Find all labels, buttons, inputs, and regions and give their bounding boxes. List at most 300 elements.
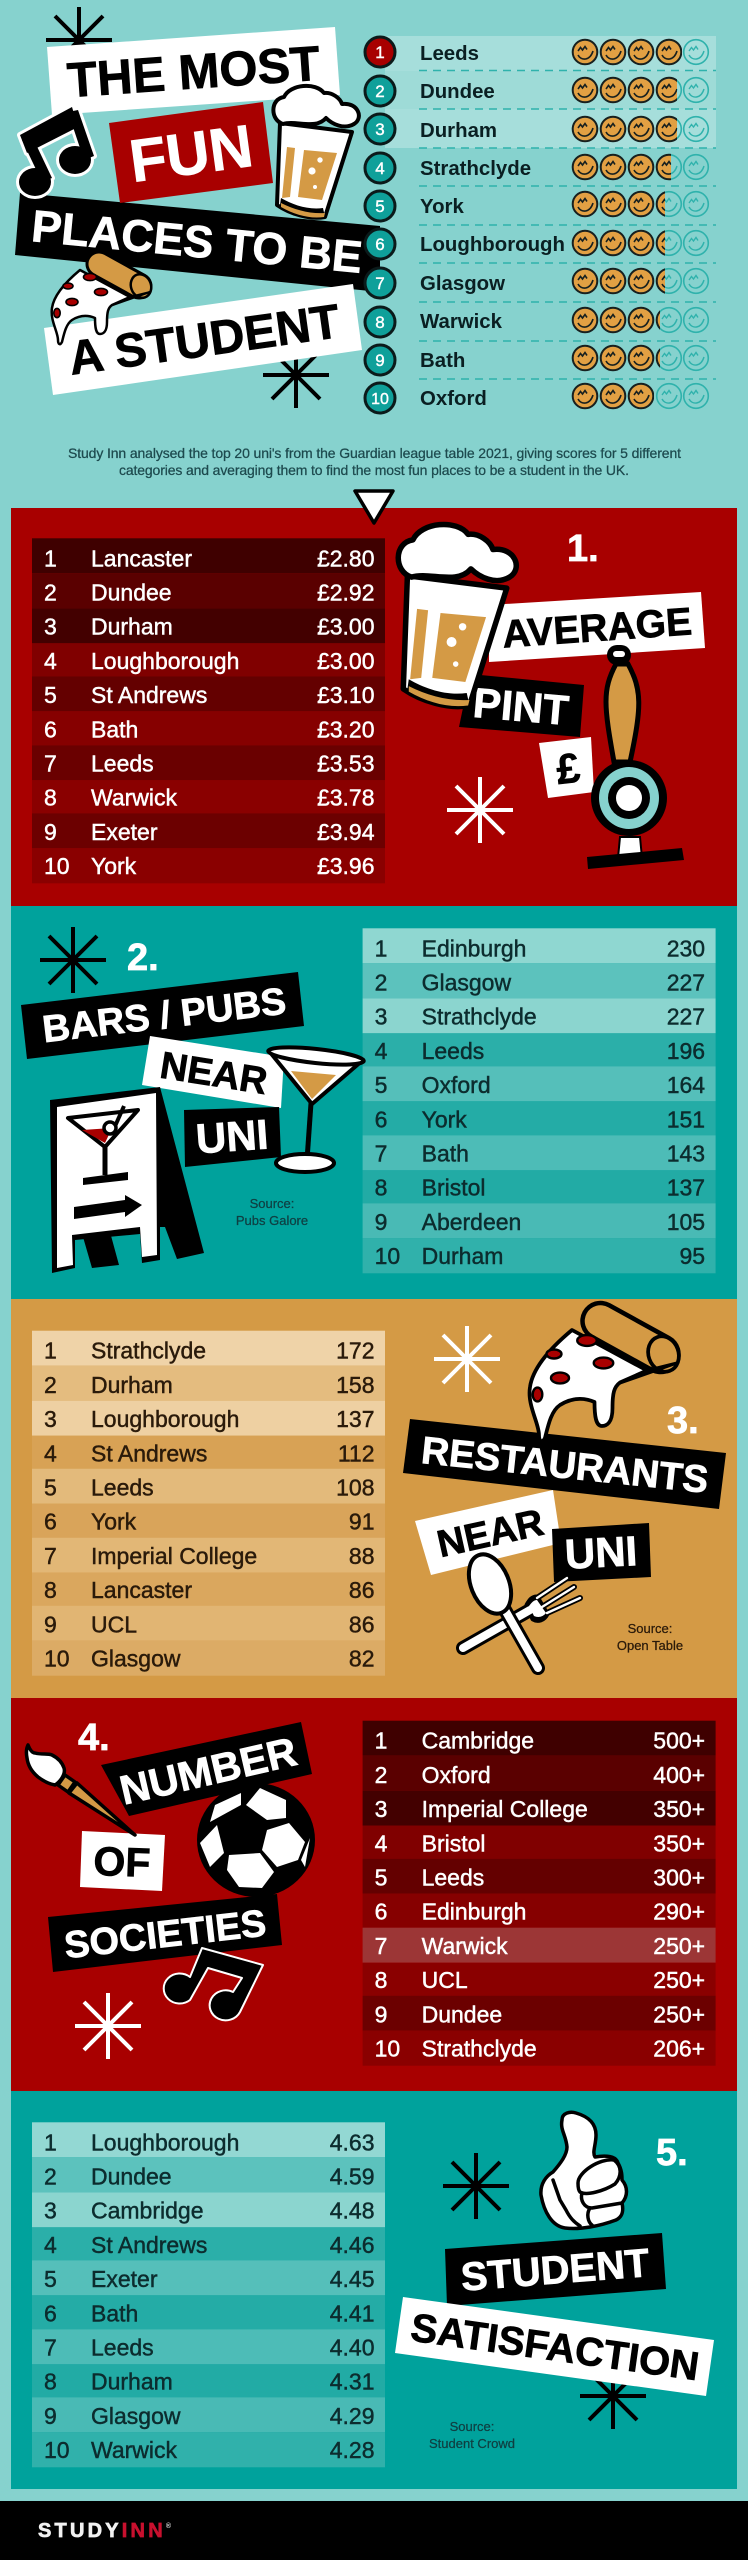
row 1: Strathclyde [91, 1338, 206, 1364]
row 4: 4 [375, 1038, 388, 1064]
rank numbers: 2 [375, 82, 385, 101]
heading: 5.: 5. [656, 2132, 688, 2174]
heading: 2.: 2. [127, 937, 159, 979]
panel background [11, 1698, 737, 2091]
row 1 [375, 935, 705, 961]
row 10 [44, 1646, 374, 1672]
row 9 [44, 819, 375, 845]
row 5: 300+ [653, 1864, 705, 1890]
row 3: Strathclyde [422, 1004, 537, 1030]
university names: York [420, 196, 464, 218]
heading: RESTAURANTS: RESTAURANTS [419, 1429, 710, 1502]
icon: football [197, 1783, 315, 1897]
row 8: 4.31 [330, 2369, 374, 2395]
panel: 5 student satisfaction [11, 2091, 737, 2489]
rank numbers: 7 [375, 274, 385, 293]
heading: STUDENT: STUDENT [459, 2241, 651, 2300]
row 6: £3.20 [317, 716, 374, 742]
panel: 1 average pint [11, 508, 737, 906]
heading: NEAR: NEAR [433, 1502, 548, 1566]
sign: mini martini [68, 1106, 138, 1185]
row 6: 6 [44, 2300, 57, 2326]
row 3: £3.00 [317, 614, 374, 640]
row 1: 500+ [653, 1728, 705, 1754]
row 3 [44, 1406, 374, 1432]
row 7: 88 [349, 1543, 374, 1569]
university names: Warwick [420, 311, 503, 333]
row 7 [375, 1140, 705, 1166]
row 10: 10 [44, 853, 70, 879]
heading: 3.: 3. [667, 1400, 699, 1442]
row 9: 9 [375, 2001, 387, 2027]
icon: paintbrush [26, 1745, 135, 1835]
row 2: 2 [44, 1372, 57, 1398]
row 4: 196 [667, 1038, 705, 1064]
university names [420, 43, 565, 410]
row 7 [44, 1543, 374, 1569]
rank badges [365, 37, 395, 413]
heading: BARS / PUBS: BARS / PUBS [40, 981, 288, 1051]
row 7 [375, 1933, 705, 1959]
row 9 [375, 1209, 705, 1235]
row 9: 9 [375, 1209, 387, 1235]
panel background [11, 906, 737, 1299]
row 1 [44, 2129, 374, 2155]
icon: pizza slice [530, 1321, 684, 1441]
row 8: 8 [44, 2369, 57, 2395]
row 6: 6 [375, 1106, 387, 1132]
row 10: Glasgow [91, 1645, 181, 1671]
row 10: 206+ [653, 2035, 705, 2061]
university names: Glasgow [420, 273, 505, 295]
rank numbers [371, 43, 389, 408]
heading: OF [80, 1831, 165, 1891]
row 5 [375, 1072, 705, 1098]
icon: thumbs up [541, 2112, 626, 2229]
title line: THE MOST: THE MOST [65, 37, 322, 108]
icon: music note white outline [164, 1948, 263, 2020]
sign: arrow [74, 1195, 142, 1219]
row 10: 10 [44, 2437, 70, 2463]
row 6 [44, 716, 374, 742]
smiley ratings: empty outlines [657, 40, 708, 408]
row 1: Lancaster [91, 545, 192, 571]
row 6: Edinburgh [422, 1899, 526, 1925]
row 7: Warwick [422, 1933, 508, 1959]
row 2: Dundee [91, 579, 172, 605]
heading: NEAR: NEAR [157, 1045, 270, 1103]
logo: StudyInn: ® [166, 2522, 172, 2530]
heading: pound sign [539, 737, 594, 798]
panel background [11, 1299, 737, 1698]
source note [617, 1621, 683, 1653]
row 10: Strathclyde [422, 2035, 537, 2061]
row 8: 8 [44, 1577, 57, 1603]
heading: UNI: UNI [194, 1111, 270, 1162]
row 2 [44, 2164, 374, 2190]
row 5: 108 [336, 1474, 374, 1500]
row 1: 4.63 [330, 2129, 374, 2155]
row 8: 86 [349, 1577, 374, 1603]
title line: FUN: FUN [125, 112, 257, 195]
title line: FUN [109, 102, 273, 203]
row 9: 9 [44, 2403, 57, 2429]
icon: black star [40, 927, 106, 993]
row 1: 1 [44, 545, 57, 571]
row 6 [44, 1509, 374, 1535]
row 5: £3.10 [317, 682, 374, 708]
row 4 [375, 1830, 705, 1856]
row 6: 4.41 [330, 2300, 374, 2326]
smiley ratings: filled faces [573, 40, 681, 408]
source note: Open Table [617, 1638, 683, 1653]
row 10: Warwick [91, 2437, 178, 2463]
row 2: 2 [44, 2164, 57, 2190]
row 1 [44, 1338, 374, 1364]
row 6: 6 [44, 716, 57, 742]
row 2: 2 [375, 969, 387, 995]
heading: 1.: 1. [567, 528, 599, 570]
ranking: overall top 10 [365, 36, 716, 413]
row 3 [375, 1004, 705, 1030]
source note [429, 2419, 515, 2451]
row 3: 3 [375, 1004, 387, 1030]
row 10 [44, 2437, 374, 2463]
row 2: 158 [336, 1372, 374, 1398]
row 10 [44, 853, 374, 879]
row 2 [375, 970, 705, 996]
row 1: 172 [336, 1338, 374, 1364]
row 7: 7 [375, 1140, 387, 1166]
row 7: £3.53 [317, 750, 374, 776]
rank numbers: 4 [375, 159, 385, 178]
university names: Bath [420, 350, 465, 372]
row 3: 137 [336, 1406, 374, 1432]
row 3: Durham [91, 614, 173, 640]
row 9 [375, 2001, 705, 2027]
row 4: Loughborough [91, 648, 239, 674]
row 8: 250+ [653, 1967, 705, 1993]
row 5: 5 [44, 1474, 57, 1500]
row 3: 3 [375, 1796, 387, 1822]
row 1 [375, 1728, 705, 1754]
row 4: St Andrews [91, 2232, 207, 2258]
row 9 [44, 2403, 374, 2429]
university names: Strathclyde [420, 158, 531, 180]
source note: Source: [450, 2419, 494, 2434]
icon: white star [434, 1326, 500, 1392]
row 10: 82 [349, 1645, 374, 1671]
heading: UNI [552, 1523, 651, 1582]
row 1: £2.80 [317, 545, 374, 571]
row 5: St Andrews [91, 682, 207, 708]
row 8 [375, 1175, 705, 1201]
panel: 2 bars and pubs [11, 906, 737, 1299]
university names: Oxford [420, 388, 487, 410]
table: societies [363, 1721, 716, 2066]
row 8 [44, 1577, 374, 1603]
row 4: 4 [375, 1830, 388, 1856]
row 7: 143 [667, 1140, 705, 1166]
row 6: 151 [667, 1106, 705, 1132]
heading: NEAR [415, 1490, 561, 1575]
rank numbers: 6 [375, 235, 385, 254]
row 3: 4.48 [330, 2198, 374, 2224]
row 3: Loughborough [91, 1406, 239, 1432]
row 5 [44, 682, 374, 708]
table: pint prices [32, 538, 385, 883]
row 3: 227 [667, 1004, 705, 1030]
row 9: UCL [91, 1611, 137, 1637]
rank numbers: 5 [375, 197, 385, 216]
row 3: Imperial College [422, 1796, 588, 1822]
source note: Source: [628, 1621, 672, 1636]
icon: white star [75, 1993, 141, 2059]
row 6: 290+ [653, 1899, 705, 1925]
row 4: 350+ [653, 1830, 705, 1856]
row 9: 4.29 [330, 2403, 374, 2429]
row 3: 3 [44, 2198, 57, 2224]
row 6: 6 [375, 1899, 387, 1925]
row 4 [44, 648, 374, 674]
row 8: 8 [44, 785, 57, 811]
row 8: UCL [422, 1967, 468, 1993]
panel background [11, 2091, 737, 2489]
icon: black star bottom [580, 2363, 646, 2429]
row 9: Exeter [91, 819, 158, 845]
panel: 4 societies [11, 1698, 737, 2091]
heading: NEAR [142, 1036, 284, 1108]
row 10: 10 [375, 1243, 400, 1269]
icon: black star top [46, 7, 112, 73]
row 2: Oxford [422, 1762, 491, 1788]
row 9: 9 [44, 1611, 57, 1637]
row 4: Bristol [422, 1830, 486, 1856]
row 10: 4.28 [330, 2437, 374, 2463]
row 2: 227 [667, 969, 705, 995]
row 7 [44, 2334, 374, 2360]
heading: UNI [184, 1107, 281, 1167]
row 10: £3.96 [317, 853, 374, 879]
row 4 [44, 1440, 374, 1466]
row 5 [44, 2266, 374, 2292]
footer [0, 2501, 748, 2560]
heading: AVERAGE: AVERAGE [501, 600, 693, 657]
intro text: categories and averaging them to find the most fun places to be a student in the UK. [119, 462, 629, 478]
row 7: 250+ [653, 1933, 705, 1959]
row 4 [375, 1038, 705, 1064]
row 9: 250+ [653, 2001, 705, 2027]
rank numbers: 9 [375, 351, 385, 370]
icon: pizza slice [52, 264, 155, 344]
row 10 [375, 1243, 705, 1269]
row 2: £2.92 [317, 579, 374, 605]
heading: STUDENT [445, 2233, 666, 2306]
row 5: 5 [375, 1864, 387, 1890]
row 3 [44, 614, 374, 640]
row 5: 164 [667, 1072, 705, 1098]
rank numbers: 10 [371, 391, 389, 408]
heading: PINT [459, 674, 584, 737]
icon: spoon and fork [461, 1548, 580, 1668]
title line: PLACES TO BE: PLACES TO BE [29, 200, 364, 283]
university names: Leeds [420, 43, 479, 65]
icon: beer tap [587, 645, 684, 869]
icon: black star left [443, 2153, 509, 2219]
row 5: Leeds [91, 1474, 154, 1500]
row 5: Leeds [422, 1864, 484, 1890]
table: satisfaction [32, 2122, 385, 2467]
row 3: 3 [44, 1406, 57, 1432]
row 8: £3.78 [317, 785, 374, 811]
row 7: Bath [422, 1140, 469, 1166]
highlighted top three rows [385, 36, 716, 148]
row 7: Leeds [91, 750, 154, 776]
row 8: 8 [375, 1967, 387, 1993]
intro text: Study Inn analysed the top 20 uni's from the Guardian league table 2021, giving scores for 5 different [68, 445, 681, 461]
source note: Student Crowd [429, 2436, 515, 2451]
row 7: 7 [44, 1543, 57, 1569]
row 3 [44, 2198, 374, 2224]
row 10 [375, 2036, 705, 2062]
row 6 [375, 1899, 705, 1925]
row 7: 7 [375, 1933, 387, 1959]
university names: Loughborough [420, 234, 565, 256]
rank numbers: 8 [375, 313, 385, 332]
row 9: Aberdeen [422, 1209, 521, 1235]
icon: beer glass [398, 524, 516, 707]
row 4: St Andrews [91, 1440, 207, 1466]
row 3: 350+ [653, 1796, 705, 1822]
row 9: Glasgow [91, 2403, 181, 2429]
table: restaurants [32, 1331, 385, 1676]
row 8: 137 [667, 1175, 705, 1201]
row 2 [44, 1372, 374, 1398]
row 2: 2 [375, 1762, 387, 1788]
row 4: 4 [44, 1440, 57, 1466]
row 9 [44, 1611, 374, 1637]
heading: 4.: 4. [78, 1717, 110, 1759]
row 6: Bath [91, 2300, 138, 2326]
row 9: 86 [349, 1611, 374, 1637]
row 5: 5 [44, 2266, 57, 2292]
panel background [11, 508, 737, 906]
row 10: York [91, 853, 137, 879]
row 4: 112 [338, 1440, 374, 1466]
dashed row separators [419, 70, 716, 379]
row 4: 4 [44, 2232, 57, 2258]
source note: Source: [250, 1196, 294, 1211]
row 4 [44, 2232, 374, 2258]
rank numbers: 1 [375, 43, 385, 62]
row 6: York [91, 1509, 137, 1535]
row 8: 8 [375, 1175, 387, 1201]
panel: 3 restaurants [11, 1299, 737, 1698]
row 3: Cambridge [91, 2198, 204, 2224]
row 5: 4.45 [330, 2266, 374, 2292]
icon: pint of beer [273, 86, 359, 218]
row 5: 5 [44, 682, 57, 708]
row 9: 105 [667, 1209, 705, 1235]
row 2: 2 [44, 579, 57, 605]
icon: martini glass [268, 1044, 364, 1172]
row 4: Leeds [422, 1038, 484, 1064]
heading: OF: OF [93, 1838, 151, 1886]
heading: UNI: UNI [564, 1527, 638, 1578]
row 2: 4.59 [330, 2164, 374, 2190]
row 7 [44, 750, 374, 776]
panel: title [15, 7, 380, 408]
rank numbers: 3 [375, 120, 385, 139]
row 1: 1 [375, 935, 387, 961]
row 1 [44, 545, 374, 571]
row 8 [44, 2369, 374, 2395]
row 1: Edinburgh [422, 935, 526, 961]
row 10: Durham [422, 1243, 503, 1269]
row 9: 9 [44, 819, 57, 845]
row 10: 95 [680, 1243, 705, 1269]
row 8 [44, 785, 374, 811]
row 7: 7 [44, 2335, 57, 2361]
row 9: Dundee [422, 2001, 502, 2027]
row 2: 400+ [653, 1762, 705, 1788]
row 7: Leeds [91, 2335, 154, 2361]
row 5 [44, 1474, 374, 1500]
row 3 [375, 1796, 705, 1822]
row 6: 91 [349, 1509, 374, 1535]
row 5 [375, 1864, 705, 1890]
row 4: 4 [44, 648, 57, 674]
row 2: Dundee [91, 2164, 172, 2190]
icon: black star bottom [263, 342, 329, 408]
row 8: Bristol [422, 1175, 486, 1201]
row 5: Exeter [91, 2266, 158, 2292]
row 7: 7 [44, 750, 57, 776]
row 1: 1 [44, 2129, 57, 2155]
row 2 [44, 580, 374, 606]
row 3: 3 [44, 614, 57, 640]
row 2: Durham [91, 1372, 173, 1398]
row 8: Durham [91, 2369, 173, 2395]
university names: Durham [420, 120, 497, 142]
row 1: Loughborough [91, 2129, 239, 2155]
row 4: 4.46 [330, 2232, 374, 2258]
row 5: Oxford [422, 1072, 491, 1098]
intro text [68, 445, 681, 478]
university names: Dundee [420, 81, 495, 103]
row 2: Glasgow [422, 969, 511, 995]
row 2 [375, 1762, 705, 1788]
icon: music note [19, 107, 94, 196]
row 6: York [422, 1106, 467, 1132]
row 7: Imperial College [91, 1543, 257, 1569]
source note: Pubs Galore [236, 1213, 308, 1228]
heading: SATISFACTION: SATISFACTION [408, 2306, 702, 2389]
row 6 [44, 2300, 374, 2326]
heading: NUMBER: NUMBER [115, 1728, 301, 1814]
title line: A STUDENT: A STUDENT [65, 295, 343, 386]
heading: SOCIETIES: SOCIETIES [62, 1903, 268, 1967]
row 6: Bath [91, 716, 138, 742]
row 4: £3.00 [317, 648, 374, 674]
row 8: Lancaster [91, 1577, 192, 1603]
heading: PINT: PINT [471, 679, 571, 734]
row 1: 230 [667, 935, 705, 961]
row 9: £3.94 [317, 819, 375, 845]
row 1: Cambridge [422, 1728, 534, 1754]
row 6: 6 [44, 1509, 57, 1535]
footer band [0, 2501, 748, 2560]
